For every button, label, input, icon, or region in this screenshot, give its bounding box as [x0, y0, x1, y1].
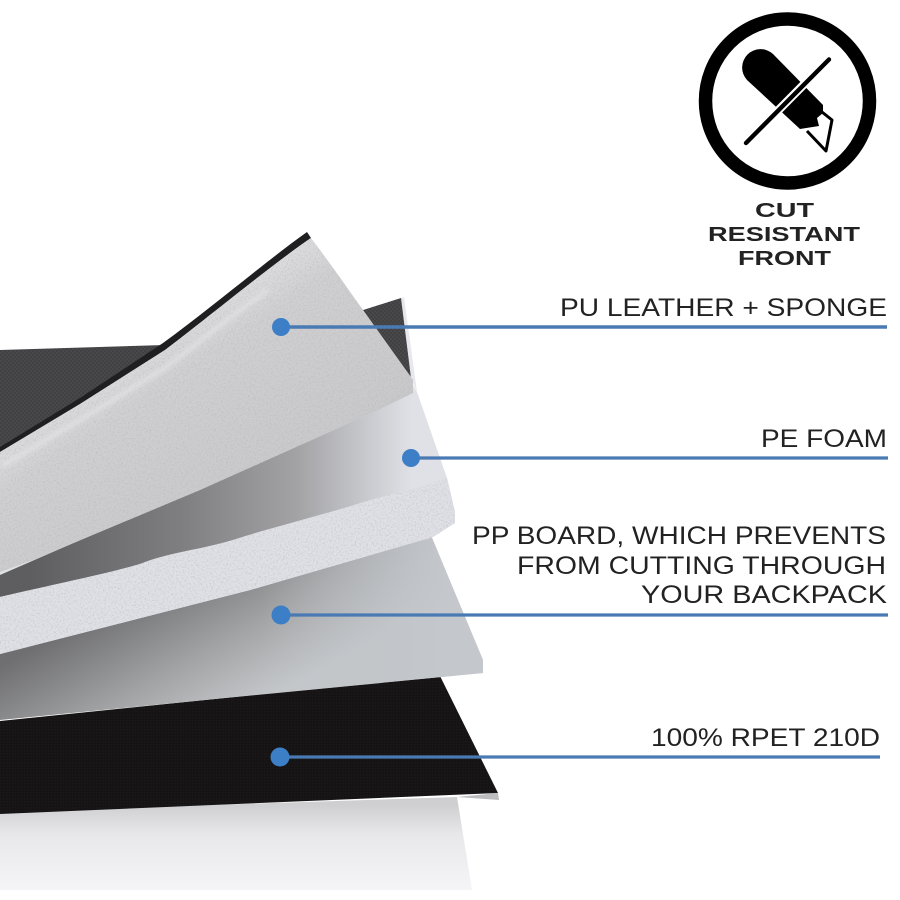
heading: cut resistant front [708, 200, 860, 270]
leader line [411, 456, 888, 460]
foam front edge [0, 478, 455, 654]
layer: leather back, left [0, 345, 165, 452]
cutter blade [807, 112, 832, 151]
dot [272, 318, 290, 336]
heading: cut resistant front: RESISTANT [708, 224, 860, 246]
dot [272, 606, 290, 624]
leader line [280, 755, 880, 759]
callout: 100% RPET 210D [270, 724, 880, 766]
callout: PP board [272, 522, 888, 624]
callout: PE foam [402, 425, 888, 467]
layer: sliver at leather edge [401, 297, 417, 392]
layer: PE foam [0, 385, 455, 654]
label text: FROM CUTTING THROUGH [517, 552, 886, 580]
dot [270, 748, 290, 766]
cutter body [742, 49, 823, 129]
photo: layered material stack [0, 232, 499, 890]
label text: PE FOAM [761, 425, 887, 453]
callout: PU leather + sponge [272, 294, 887, 336]
dot [402, 449, 420, 467]
label text: 100% RPET 210D [651, 724, 880, 752]
leader line [281, 325, 887, 329]
ring [706, 19, 870, 183]
heading: cut resistant front: CUT [755, 200, 814, 222]
label text: YOUR BACKPACK [641, 581, 887, 609]
layer: leather back, right corner [360, 298, 411, 377]
icon: crossed-out cutter in a ring [706, 19, 870, 183]
sponge highlight band [2, 290, 268, 466]
layer: PP board [0, 533, 483, 720]
layer: paper surface under stack [0, 797, 472, 890]
layer: 100% RPET 210D black fabric [0, 676, 499, 814]
heading: cut resistant front: FRONT [738, 248, 831, 270]
leader line [281, 613, 888, 617]
layer: PU leather + sponge [0, 232, 413, 572]
label text [472, 522, 887, 609]
label text: PP BOARD, WHICH PREVENTS [472, 522, 886, 550]
cross line [746, 60, 829, 143]
cross line halo [746, 59, 829, 143]
foam inner shadow [0, 392, 416, 597]
label text: PU LEATHER + SPONGE [560, 294, 887, 322]
